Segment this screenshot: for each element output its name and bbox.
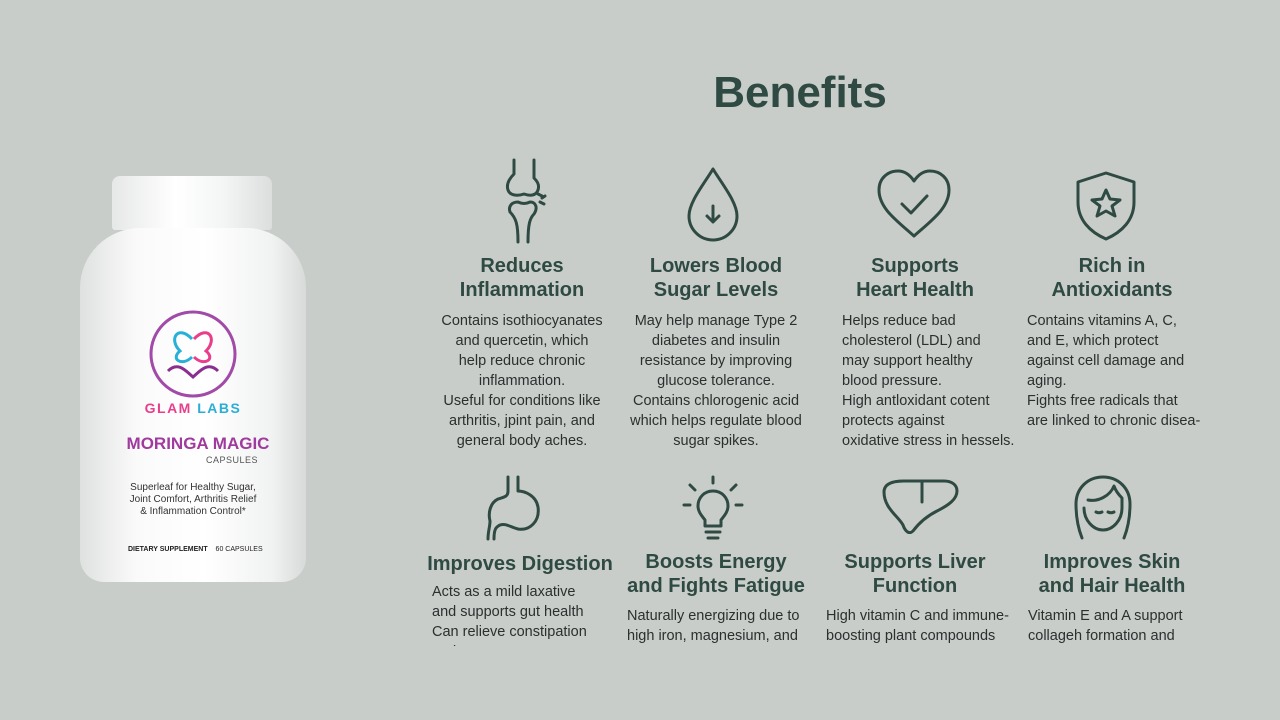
benefit: Antioxidants: Rich in bbox=[1079, 255, 1145, 277]
benefit: Skin and Hair: and Hair Health bbox=[1039, 575, 1185, 597]
tagline: Joint Comfort, Arthritis Relief bbox=[130, 494, 256, 505]
benefit: Heart Health bbox=[842, 255, 1014, 449]
benefit: Reduces Inflammation: inflammation. bbox=[479, 373, 565, 389]
benefit: Antioxidants bbox=[1027, 255, 1200, 429]
product name: MORINGA MAGIC bbox=[127, 434, 269, 453]
benefit: Energy: high iron, magnesium, and bbox=[627, 628, 798, 644]
benefit: Reduces Inflammation: general body aches. bbox=[457, 433, 587, 449]
benefit: Antioxidants: Contains vitamins A, C, bbox=[1027, 313, 1177, 329]
benefit: Antioxidants: and E, which protect bbox=[1027, 333, 1158, 349]
benefit: Lowers Blood Sugar: Lowers Blood bbox=[650, 255, 782, 277]
benefit: Reduces Inflammation: Useful for conditions like bbox=[443, 393, 601, 409]
benefit: Antioxidants: against cell damage and bbox=[1027, 353, 1184, 369]
benefit: Lowers Blood Sugar: resistance by improving bbox=[640, 353, 792, 369]
bottle cap bbox=[112, 176, 272, 230]
benefit: Reduces Inflammation bbox=[441, 255, 603, 449]
benefit: Liver: Supports Liver bbox=[844, 551, 986, 573]
benefit: Energy: and Fights Fatigue bbox=[627, 575, 805, 597]
benefit: Lowers Blood Sugar: Contains chlorogenic acid bbox=[633, 393, 799, 409]
benefit: Heart Health: Supports bbox=[871, 255, 959, 277]
benefit: Digestion: and supports gut health bbox=[432, 604, 584, 620]
icon: heart bbox=[878, 170, 950, 238]
benefit: Lowers Blood Sugar: sugar spikes. bbox=[673, 433, 759, 449]
benefit: Heart Health: Heart Health bbox=[856, 279, 974, 301]
benefit: Reduces Inflammation: Inflammation bbox=[460, 279, 584, 301]
benefit: Lowers Blood Sugar: May help manage Type 2 bbox=[635, 313, 797, 329]
benefit: Digestion bbox=[427, 553, 613, 646]
logo bbox=[150, 310, 236, 398]
benefit: Antioxidants: aging. bbox=[1027, 373, 1067, 389]
row 2 clipped bbox=[427, 476, 1185, 646]
benefit: Heart Health: Helps reduce bad bbox=[842, 313, 956, 329]
benefit: Heart Health: protects against bbox=[842, 413, 944, 429]
footer text: DIETARY SUPPLEMENT 60 CAPSULES bbox=[128, 546, 263, 553]
benefit: Digestion: Can relieve constipation bbox=[432, 624, 587, 640]
benefit: Liver: Function bbox=[873, 575, 957, 597]
benefit: Liver: boosting plant compounds bbox=[826, 628, 995, 644]
icon: face bbox=[1074, 476, 1132, 540]
benefit: Skin and Hair: collageh formation and bbox=[1028, 628, 1175, 644]
benefit: Skin and Hair bbox=[1028, 551, 1185, 644]
icon: drop bbox=[688, 167, 738, 242]
benefit: Heart Health: oxidative stress in hessels. bbox=[842, 433, 1014, 449]
icon: joint bbox=[506, 158, 547, 244]
benefit: Lowers Blood Sugar bbox=[630, 255, 802, 449]
benefit: Antioxidants: are linked to chronic disea- bbox=[1027, 413, 1200, 429]
icon: bulb bbox=[682, 476, 744, 540]
benefit: Heart Health: High antloxidant cotent bbox=[842, 393, 990, 409]
tagline: & Inflammation Control* bbox=[140, 506, 246, 517]
benefit: Energy bbox=[627, 551, 805, 644]
bottle body bbox=[80, 228, 306, 582]
benefit: Heart Health: may support healthy bbox=[842, 353, 973, 369]
benefit: Liver bbox=[826, 551, 1009, 644]
benefit: Antioxidants: Fights free radicals that bbox=[1027, 393, 1178, 409]
benefit: Liver: High vitamin C and immune- bbox=[826, 608, 1009, 624]
benefit: Antioxidants: Antioxidants bbox=[1051, 279, 1173, 301]
benefit: Reduces Inflammation: Reduces bbox=[480, 255, 564, 277]
product bottle bbox=[80, 176, 306, 582]
tagline: Superleaf for Healthy Sugar, bbox=[130, 482, 256, 493]
benefit: Lowers Blood Sugar: which helps regulate blood bbox=[630, 413, 802, 429]
benefit: Lowers Blood Sugar: glucose tolerance. bbox=[657, 373, 775, 389]
product bottle: CAPSULES bbox=[206, 455, 258, 465]
icon: liver bbox=[882, 480, 958, 534]
benefit: Reduces Inflammation: arthritis, jpint pain, and bbox=[449, 413, 595, 429]
benefit: Energy: Boosts Energy bbox=[645, 551, 787, 573]
benefit: Skin and Hair: Vitamin E and A support bbox=[1028, 608, 1183, 624]
benefit: Lowers Blood Sugar: diabetes and insulin bbox=[652, 333, 780, 349]
benefit: Reduces Inflammation: help reduce chronic bbox=[459, 353, 585, 369]
brand name: GLAM LABS bbox=[145, 400, 241, 416]
tagline bbox=[130, 482, 256, 517]
benefit: Heart Health: blood pressure. bbox=[842, 373, 942, 389]
benefit: Lowers Blood Sugar: Sugar Levels bbox=[654, 279, 778, 301]
icon: stomach bbox=[486, 476, 540, 540]
icon: shield star bbox=[1076, 172, 1136, 240]
benefit: Heart Health: cholesterol (LDL) and bbox=[842, 333, 981, 349]
benefit: Reduces Inflammation: and quercetin, which bbox=[456, 333, 588, 349]
benefit: Energy: Naturally energizing due to bbox=[627, 608, 800, 624]
benefit: Digestion: Improves Digestion bbox=[427, 553, 613, 575]
benefit: Reduces Inflammation: Contains isothiocyanates bbox=[441, 313, 603, 329]
title: Benefits bbox=[713, 68, 887, 117]
benefit: Digestion: Acts as a mild laxative bbox=[432, 584, 575, 600]
benefit: Skin and Hair: Improves Skin bbox=[1044, 551, 1180, 573]
